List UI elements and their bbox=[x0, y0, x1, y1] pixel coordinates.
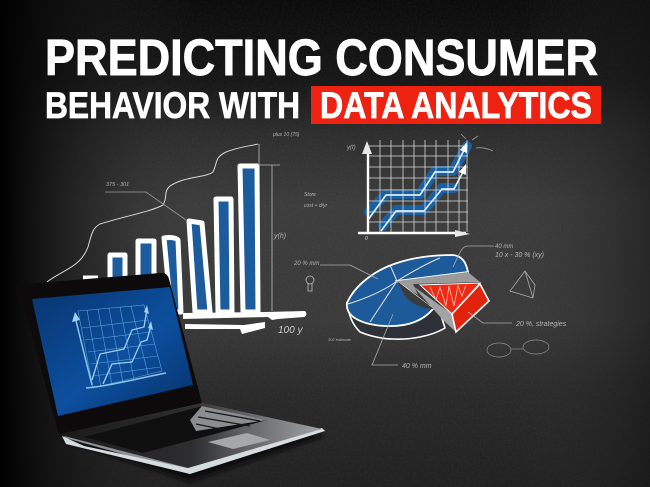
laptop shadow bbox=[62, 408, 325, 482]
pie leaders and labels: 40 mm bbox=[495, 244, 513, 250]
chart baseline arrows bbox=[183, 311, 306, 320]
laptop screen bbox=[32, 287, 193, 416]
hatch inner wall bbox=[397, 272, 480, 295]
pie leaders and labels: 10 x - 30 % (xy) bbox=[495, 252, 544, 259]
pie leaders and labels: 302 estimate bbox=[328, 337, 352, 342]
pyramid doodle bbox=[510, 271, 535, 298]
leader line bbox=[105, 192, 186, 220]
grid bbox=[367, 140, 468, 232]
red slice bbox=[420, 283, 480, 314]
screen chart bbox=[72, 305, 166, 388]
pie leaders and labels: 40 % mm bbox=[402, 363, 432, 370]
laptop bbox=[20, 273, 325, 482]
bar chart annotations: 375 - 301 bbox=[106, 182, 129, 188]
pie leaders and labels: 20 %, strategies bbox=[515, 321, 567, 328]
bar chart annotations: plus 10 (75) bbox=[272, 132, 300, 138]
bar chart annotations: 100 y bbox=[278, 325, 303, 336]
keyboard bbox=[84, 406, 267, 453]
dimension line bbox=[258, 144, 280, 311]
title line 2: BEHAVIOR WITH bbox=[45, 85, 300, 126]
growth curve bbox=[47, 144, 258, 282]
trackpad bbox=[208, 433, 270, 449]
bar chart annotations: Store bbox=[304, 192, 316, 198]
highlighted blue bands bbox=[369, 146, 467, 226]
bar chart annotations bbox=[106, 132, 328, 336]
bar chart annotations: cost + d/yr bbox=[304, 203, 328, 209]
title bbox=[45, 29, 601, 126]
bar chart annotations: y(h) bbox=[273, 233, 286, 240]
dark wedge bbox=[397, 281, 434, 309]
pie thickness side bbox=[347, 303, 445, 339]
light bulb icon bbox=[306, 276, 314, 291]
graph labels bbox=[346, 134, 493, 242]
axes bbox=[358, 146, 466, 233]
slice lines bbox=[348, 258, 440, 322]
pie chart sketch bbox=[293, 244, 567, 370]
laptop lid bbox=[20, 273, 202, 434]
pie leaders and labels bbox=[293, 244, 567, 370]
bars bbox=[83, 166, 258, 312]
laptop base edge bbox=[62, 403, 325, 473]
line graph sketch bbox=[346, 134, 493, 242]
bar chart sketch bbox=[47, 132, 328, 336]
red slice scribble bbox=[430, 285, 466, 306]
data lines bbox=[368, 148, 465, 231]
deck bbox=[64, 403, 322, 468]
graph labels: 0 bbox=[365, 236, 368, 242]
highlighted phrase: data analytics: DATA ANALYTICS bbox=[320, 85, 592, 126]
blue pie top bbox=[347, 255, 468, 326]
graph labels: y(t) bbox=[346, 145, 356, 151]
pie leaders and labels: 20 % mm bbox=[293, 261, 319, 267]
flow doodle bbox=[487, 340, 549, 357]
